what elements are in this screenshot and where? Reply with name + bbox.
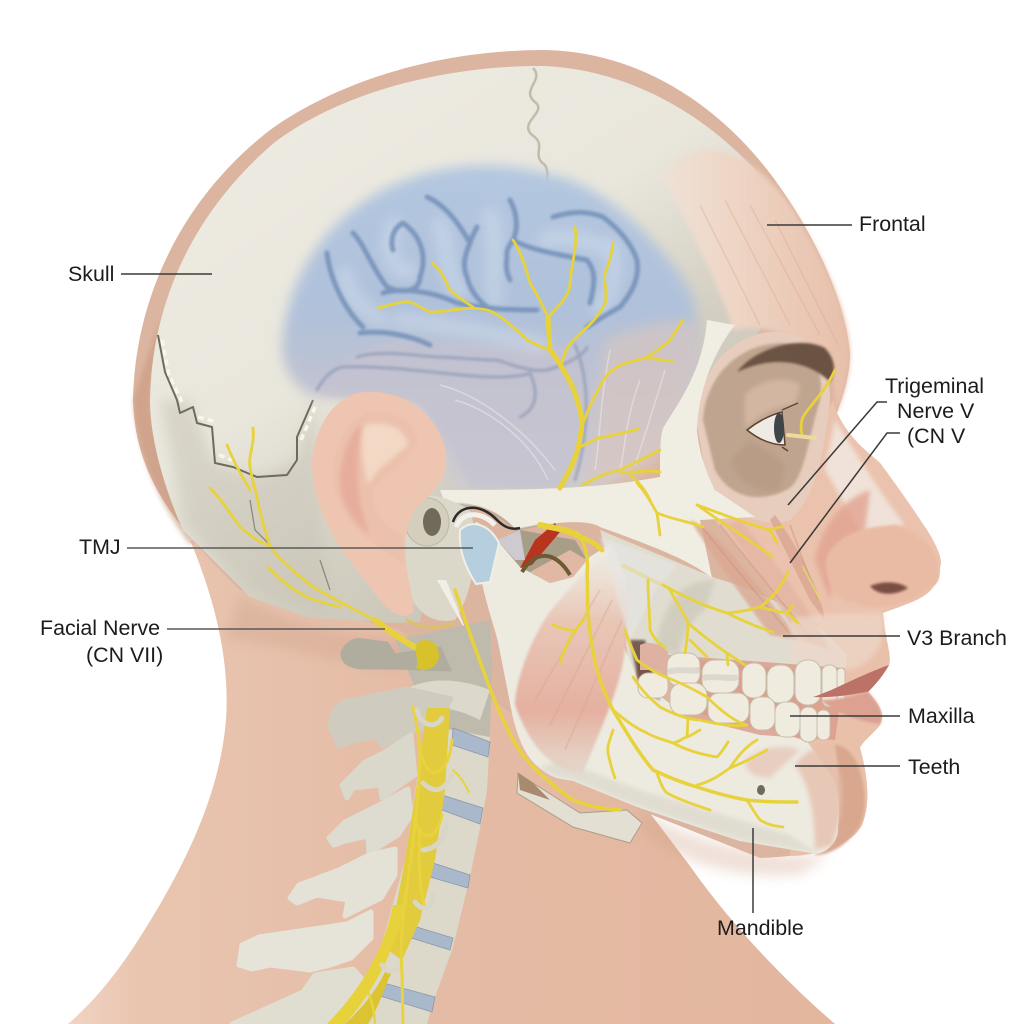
mandible lower shading: [540, 760, 817, 853]
label: Maxilla: Maxilla: [908, 704, 975, 728]
label: Facial Nerve (CN VII): Facial Nerve: [40, 616, 160, 640]
label: Frontal: Frontal: [859, 212, 926, 236]
occipital plate shading: [160, 400, 330, 620]
brain branches: [378, 227, 683, 500]
ear: [312, 392, 446, 616]
label: Mandible: [717, 828, 804, 940]
cheek bone and orbital rim: [440, 320, 755, 578]
label: V3 Branch: V3 Branch: [907, 626, 1007, 650]
frontal lower lobe: [585, 321, 699, 489]
ear canal and temporal bone: [400, 495, 475, 635]
skull dome: [150, 66, 780, 623]
lower face skin: [790, 613, 890, 856]
teeth: [630, 640, 845, 742]
lambdoid suture: [158, 335, 313, 477]
label: Trigeminal Nerve V: [788, 374, 984, 563]
label: Teeth: Teeth: [908, 755, 960, 779]
head skin outline: [133, 50, 941, 858]
neck skin: [68, 540, 835, 1024]
forehead muscle: frontal: [660, 150, 850, 413]
face branches: [553, 370, 835, 827]
brain: [282, 165, 699, 490]
gum: [640, 643, 668, 670]
inner ear: [333, 412, 417, 565]
hyoid bone: [517, 773, 642, 843]
label: Trigeminal Nerve V: Trigeminal: [885, 374, 984, 398]
atlas block: [395, 620, 492, 745]
bone rings: [382, 710, 452, 971]
orbit with eye: [697, 332, 834, 523]
label: Skull: Skull: [68, 262, 114, 286]
intervertebral discs: [377, 728, 490, 1012]
sulci: [327, 197, 638, 345]
midface skin and nose: [715, 400, 941, 655]
label: Facial Nerve (CN VII): [40, 616, 385, 667]
facial muscles: [690, 515, 883, 670]
temporalis tendon: [600, 537, 677, 640]
nasal muscle: [815, 490, 870, 600]
TMJ capsule: [453, 508, 520, 584]
lower teeth: [638, 673, 668, 698]
nerve roots: [367, 707, 469, 1024]
gyri highlights: [345, 215, 614, 345]
cervical spine: [232, 620, 492, 1024]
temporal lobe: [318, 340, 585, 488]
eyebrow: [737, 343, 834, 382]
coronal suture: [528, 68, 552, 208]
upper teeth: [667, 653, 700, 686]
maxilla: [600, 530, 847, 690]
label: Facial Nerve (CN VII): (CN VII): [86, 643, 163, 667]
occipital branches: [210, 428, 453, 627]
label: TMJ: TMJ: [79, 535, 121, 559]
mental foramen: [757, 785, 765, 795]
label: Mandible: Mandible: [717, 916, 804, 940]
masseter muscle: [515, 547, 627, 773]
vertebral column: [345, 725, 490, 1024]
label: Trigeminal Nerve V: (CN V: [907, 424, 966, 448]
facial nerve ganglion: [416, 640, 439, 670]
occipital fissure: [250, 500, 330, 590]
dark gap: [630, 640, 660, 700]
mandible: [460, 523, 838, 853]
lips: [813, 665, 889, 724]
trigeminal and facial nerves: [210, 227, 835, 827]
spinal cord: [327, 707, 469, 1024]
chin muscle: [745, 747, 842, 850]
spinous processes: [232, 689, 451, 1024]
nose tip: [826, 525, 939, 607]
notch with artery: [497, 523, 587, 583]
nose bridge highlight: [825, 420, 905, 530]
label: Trigeminal Nerve V: Nerve V: [897, 399, 975, 423]
upper lip translucent skin: [790, 613, 883, 670]
eye: [747, 412, 785, 445]
